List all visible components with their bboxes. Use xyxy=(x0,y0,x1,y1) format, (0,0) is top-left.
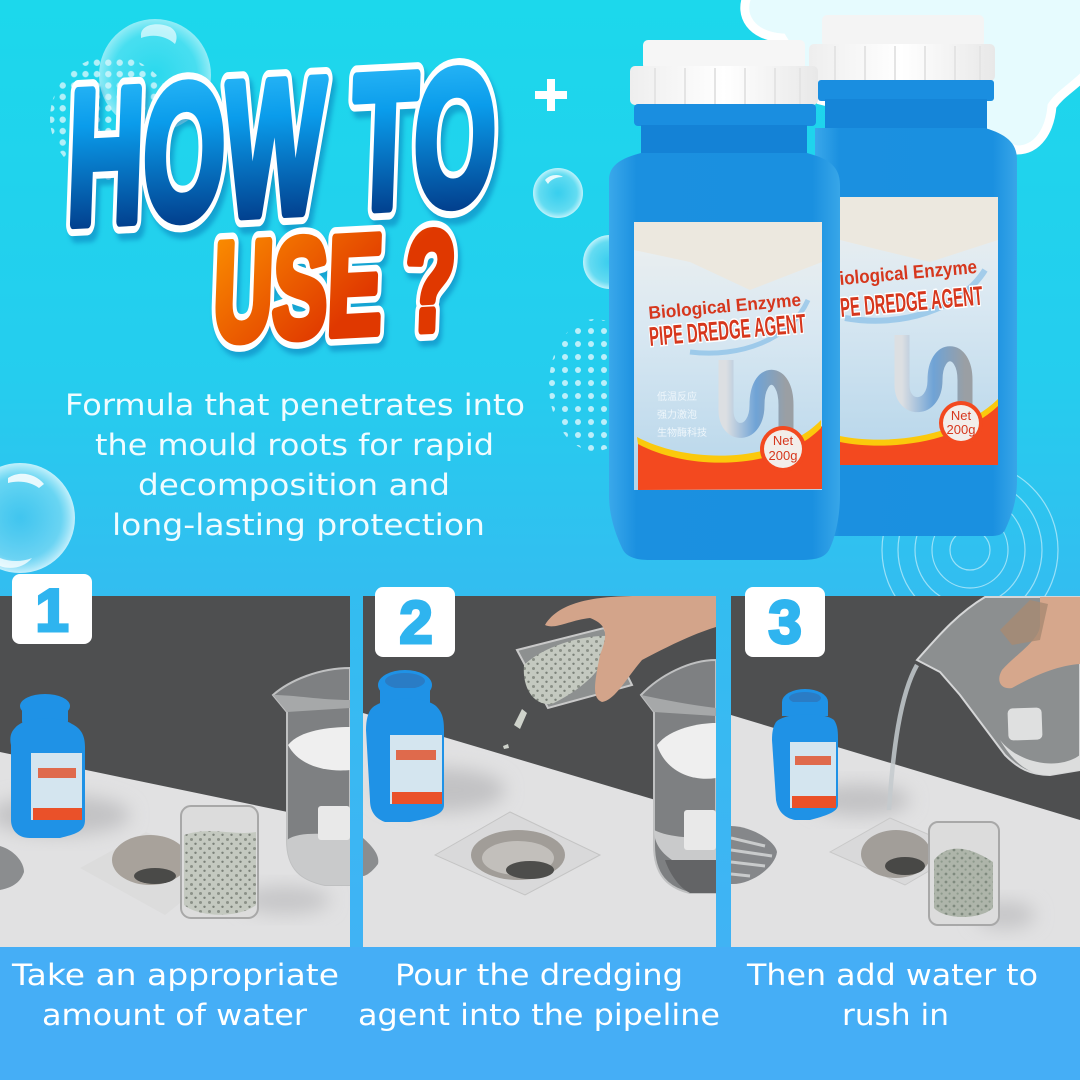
small bottle: step 3 xyxy=(772,689,838,820)
drain: step 1 xyxy=(112,835,180,885)
bubble: top left xyxy=(99,19,211,131)
label: front bottle: 强力激泡 xyxy=(657,408,697,421)
badge: step 1: 1 xyxy=(35,577,69,644)
photo: step 1 xyxy=(0,596,350,947)
bubble: behind bottle xyxy=(583,235,637,289)
caption: step 2: agent into the pipeline xyxy=(358,998,720,1032)
glass of granules: step 3 xyxy=(929,822,999,925)
label: back bottle: Net xyxy=(951,408,972,423)
bubble: left xyxy=(0,463,75,573)
concentric rings xyxy=(882,462,1058,638)
caption: step 2: Pour the dredging xyxy=(395,958,683,992)
label: front bottle: Net xyxy=(773,433,794,448)
caption: step 2 xyxy=(358,958,720,1032)
label: front bottle: 生物酶科技 xyxy=(657,426,707,439)
description text: Formula that penetrates into xyxy=(65,388,525,422)
caption: step 1: Take an appropriate xyxy=(11,958,339,992)
description text xyxy=(65,388,525,542)
caption: step 3 xyxy=(746,958,1038,1032)
label: back bottle: 200g xyxy=(947,422,975,437)
title: USE ? xyxy=(211,201,461,377)
halftone dots: middle xyxy=(549,319,641,451)
caption: step 1: amount of water xyxy=(42,998,307,1032)
title: USE ?: USE ? xyxy=(214,207,461,377)
water stream xyxy=(889,665,917,810)
description text: long-lasting protection xyxy=(112,508,485,542)
floor grate xyxy=(731,826,777,884)
beaker: step 1 xyxy=(273,668,350,885)
title: HOW TO: HOW TO xyxy=(65,30,499,265)
badge: step 3: 3 xyxy=(768,589,802,656)
title: HOW TO: HOW TO xyxy=(65,30,499,265)
label: front bottle: 低温反应 xyxy=(657,390,697,403)
badge: step 2: 2 xyxy=(399,589,433,656)
caption: step 3: Then add water to xyxy=(746,958,1038,992)
title: HOW TO: HOW TO xyxy=(68,37,503,272)
badge: step 3 xyxy=(745,587,825,657)
label: back bottle xyxy=(839,197,998,465)
drain: step 2 xyxy=(435,812,600,895)
photo: step 3 xyxy=(731,596,1080,947)
label: front bottle: Biological Enzyme xyxy=(648,290,802,323)
title: USE ?: USE ? xyxy=(211,201,458,371)
drain: step 3 xyxy=(829,818,928,886)
caption: step 1 xyxy=(11,958,339,1032)
caption band xyxy=(0,947,1080,1080)
badge: step 1 xyxy=(12,574,92,644)
small bottle: step 1 xyxy=(10,694,85,838)
title: HOW TO xyxy=(64,30,503,272)
small bottle: step 2 xyxy=(366,670,444,822)
product bottle: back xyxy=(809,15,1017,536)
tilted beaker and hand xyxy=(917,597,1080,775)
label: front bottle xyxy=(634,222,822,490)
caption: step 3: rush in xyxy=(842,998,949,1032)
bubble: small centre xyxy=(533,168,583,218)
description text: the mould roots for rapid xyxy=(95,428,494,462)
label: back bottle: iological Enzyme xyxy=(839,257,978,290)
label: front bottle: 200g xyxy=(769,448,797,463)
beaker: step 2 xyxy=(641,660,716,893)
photo: step 2 xyxy=(363,596,716,947)
title: USE ?: USE ? xyxy=(211,201,458,371)
plus sign xyxy=(535,79,567,111)
description text: decomposition and xyxy=(138,468,450,502)
hand and granule cup: step 2 xyxy=(503,596,716,749)
halftone dots: top left xyxy=(50,56,174,180)
glass of granules: step 1 xyxy=(181,806,258,918)
decorative cloud top right xyxy=(745,0,1080,150)
product bottle: front xyxy=(609,40,840,560)
label: front bottle: PIPE DREDGE AGENT xyxy=(648,308,807,352)
badge: step 2 xyxy=(375,587,455,657)
